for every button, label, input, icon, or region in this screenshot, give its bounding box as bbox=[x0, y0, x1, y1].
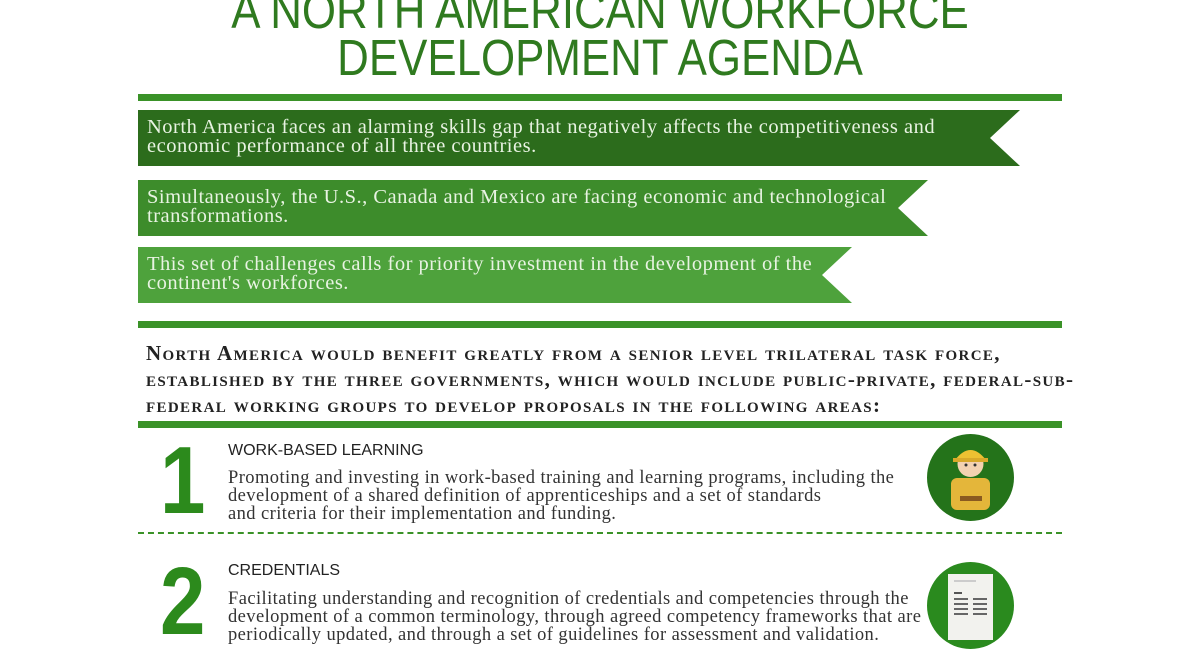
item 1 body: Promoting and investing in work-based training and learning programs, including the bbox=[228, 468, 894, 488]
icon: worker bbox=[927, 434, 1014, 521]
intro statement: established by the three governments, which would include public-private, federal-sub- bbox=[146, 367, 1074, 391]
banner 3: continent's workforces. bbox=[147, 272, 349, 294]
banner 1: economic performance of all three countries. bbox=[147, 135, 537, 157]
banner 3: This set of challenges calls for priority investment in the development of the bbox=[147, 253, 812, 275]
item 2 body: periodically updated, and through a set of guidelines for assessment and validation. bbox=[228, 625, 879, 645]
item 2 body: development of a common terminology, through agreed competency frameworks that are bbox=[228, 607, 921, 627]
banner 2: Simultaneously, the U.S., Canada and Mexico are facing economic and technological bbox=[147, 186, 886, 208]
item 2 number: 2 bbox=[160, 548, 205, 655]
intro statement bbox=[146, 341, 1074, 417]
banner 1 bbox=[138, 110, 1020, 166]
intro statement: federal working groups to develop proposals in the following areas: bbox=[146, 393, 881, 417]
item 1 number: 1 bbox=[160, 427, 205, 534]
banner 1: North America faces an alarming skills gap that negatively affects the competitiveness and bbox=[147, 116, 935, 138]
item 1 body bbox=[228, 468, 894, 524]
intro statement: North America would benefit greatly from a senior level trilateral task force, bbox=[146, 341, 1001, 365]
title: DEVELOPMENT AGENDA bbox=[337, 29, 863, 86]
item 2 heading: CREDENTIALS bbox=[228, 562, 340, 579]
banner 2: transformations. bbox=[147, 205, 289, 227]
item 2 body: Facilitating understanding and recognition of credentials and competencies through the bbox=[228, 589, 909, 609]
title bbox=[231, 0, 969, 86]
divider bbox=[138, 532, 1062, 534]
icon: document bbox=[927, 562, 1014, 649]
item 1 heading: WORK-BASED LEARNING bbox=[228, 442, 424, 459]
item 1 body: development of a shared definition of apprenticeships and a set of standards bbox=[228, 486, 821, 506]
item 2 body bbox=[228, 589, 921, 645]
banner 3 bbox=[138, 247, 852, 303]
item 1 body: and criteria for their implementation and funding. bbox=[228, 504, 616, 524]
banner 2 bbox=[138, 180, 928, 236]
